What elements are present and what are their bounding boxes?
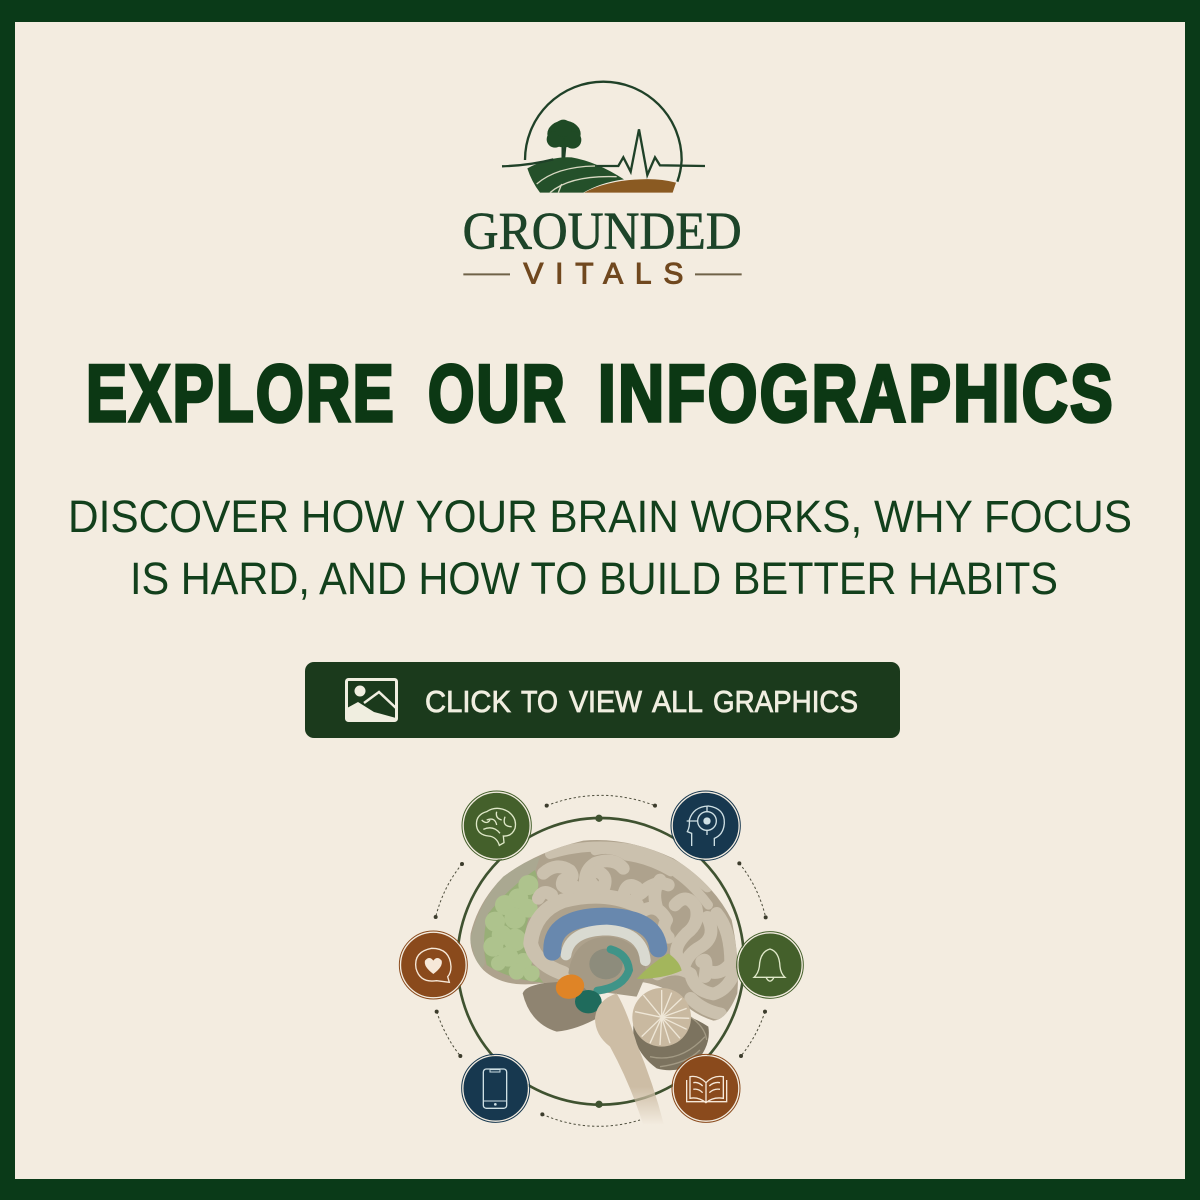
icon badge: focus head <box>671 791 740 860</box>
lower cerebellum <box>633 1012 709 1070</box>
logo brown field <box>584 179 676 193</box>
logo: Grounded Vitals <box>463 82 742 291</box>
logo tree <box>547 120 581 159</box>
title: OUR <box>428 349 567 439</box>
title: EXPLORE <box>86 349 396 439</box>
logo wordmark GROUNDED: GROUNDED <box>463 200 742 260</box>
logo emblem circle <box>525 82 682 182</box>
gyri folds <box>531 846 734 1014</box>
cerebellum <box>632 988 691 1047</box>
teal limbic arc <box>597 949 629 991</box>
button label: TO <box>521 684 558 719</box>
subtitle: DISCOVER HOW YOUR BRAIN WORKS, WHY FOCUS <box>68 491 1132 542</box>
button label: VIEW <box>569 684 643 719</box>
orbit ring <box>457 815 744 1108</box>
green frontal region <box>483 870 543 983</box>
logo wordmark VITALS: VITALS <box>523 258 683 291</box>
brainstem <box>595 993 664 1125</box>
title <box>86 349 1115 439</box>
inner brain cavity <box>568 937 647 997</box>
button: click to view all graphics <box>305 662 900 738</box>
button label: CLICK <box>425 684 511 719</box>
subtitle: IS HARD, AND HOW TO BUILD BETTER HABITS <box>130 553 1058 604</box>
cerebrum <box>470 840 738 1021</box>
button label: ALL <box>652 684 703 719</box>
icon badge: phone <box>462 1054 530 1122</box>
dark teal structure <box>575 990 602 1013</box>
dotted arcs <box>436 795 766 1126</box>
arc end dots <box>434 804 768 1116</box>
icon: picture <box>346 680 396 720</box>
icon badge: bell <box>737 932 803 998</box>
icon badge: brain <box>462 791 531 860</box>
orbit ring and dotted arcs <box>434 795 768 1126</box>
icon badge: book <box>672 1054 740 1122</box>
icon badges <box>399 791 803 1122</box>
logo heartbeat line <box>502 129 705 175</box>
grey outer frontal rim <box>476 865 521 969</box>
orange amygdala <box>553 971 587 1002</box>
corpus callosum blue <box>552 917 658 952</box>
logo green hills <box>527 157 624 193</box>
temporal lobe <box>523 980 600 1032</box>
button label <box>425 684 858 719</box>
brain illustration <box>470 840 738 1125</box>
green insula <box>637 953 682 979</box>
thalamus <box>589 949 623 979</box>
button label: GRAPHICS <box>713 684 858 719</box>
icon badge: heart chat <box>399 931 467 999</box>
logo side rules <box>463 271 742 277</box>
subtitle <box>68 491 1132 604</box>
corpus callosum pale band <box>566 930 645 961</box>
